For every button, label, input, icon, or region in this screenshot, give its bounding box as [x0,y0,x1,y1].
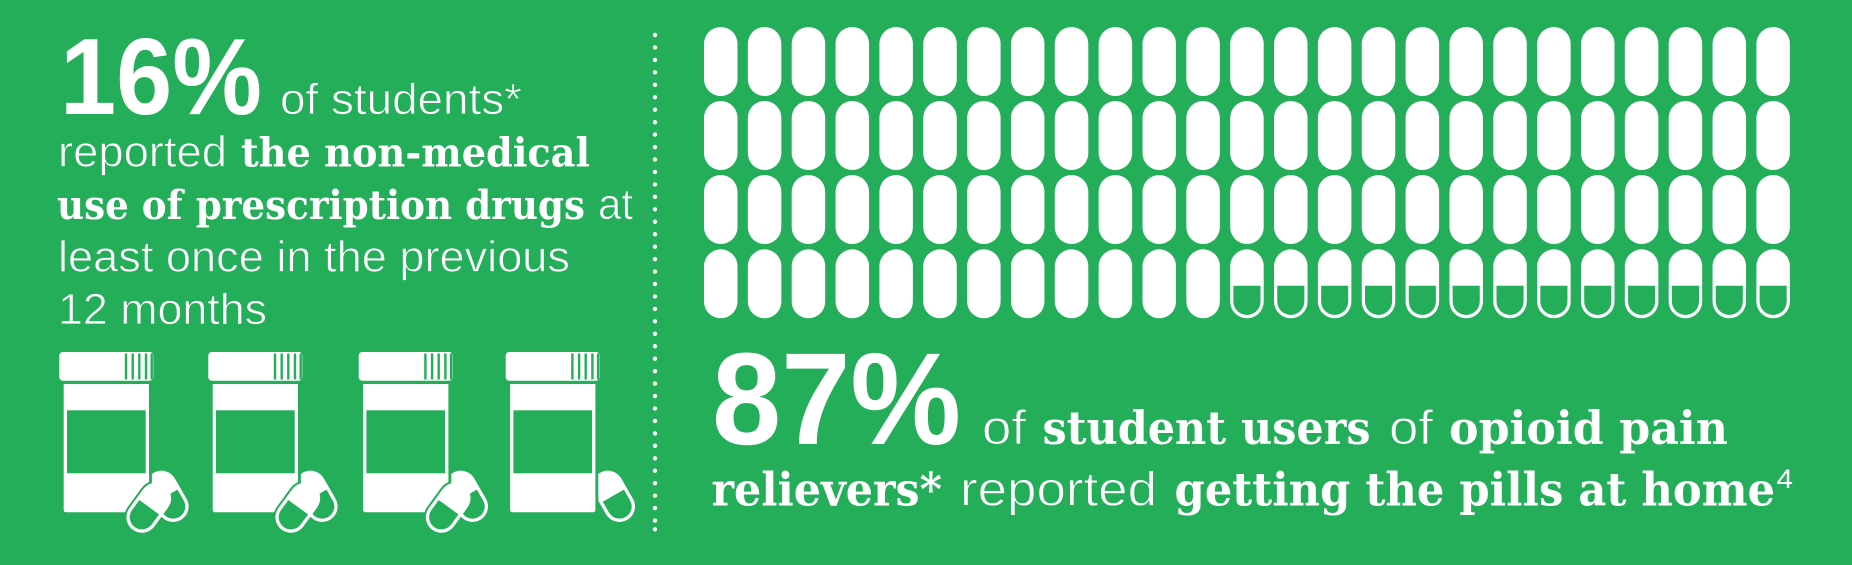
text block: opioid pain relievers: 4 [1776,464,1793,494]
pill row 2 [704,101,1790,170]
headline: 16%: 16% [60,16,262,138]
pill row 1 [704,27,1790,96]
text block: non-medical use of prescription drugs: of students* [280,75,522,124]
text block: opioid pain relievers: student users [1042,401,1370,455]
text block: non-medical use of prescription drugs: 12 months [58,285,267,334]
headline: 87%: 87% [712,325,961,472]
text block: opioid pain relievers: of [982,402,1027,455]
dotted divider [653,35,657,532]
text block: non-medical use of prescription drugs: the non-medical [241,130,590,177]
pill row 3 [704,175,1790,244]
text block: opioid pain relievers [712,401,1793,517]
text block: non-medical use of prescription drugs: least once in the previous [58,233,570,282]
pill row 4: 12 full, 13 half [704,249,1790,318]
text block: opioid pain relievers: opioid pain [1449,401,1728,455]
text block: non-medical use of prescription drugs: at [598,180,633,229]
icon: bottle with pills 2 [208,352,343,542]
chart: 100 pills, 87 filled [704,27,1790,318]
text block: opioid pain relievers: relievers* [712,463,942,517]
text block: non-medical use of prescription drugs [57,75,633,334]
panel: pill chart and statistic [704,27,1793,517]
icon: bottle with half pill 4 [506,352,641,528]
text block: non-medical use of prescription drugs: reported [58,128,227,177]
icon: bottle with pills 1 [59,352,194,542]
text block: opioid pain relievers: reported [960,464,1157,517]
text block: opioid pain relievers: getting the pills at home [1174,463,1775,517]
text block: non-medical use of prescription drugs: use of prescription drugs [57,182,585,229]
icon: bottle with pills 3 [359,352,494,542]
panel: left statistic [57,16,641,542]
text block: opioid pain relievers: of [1389,402,1434,455]
